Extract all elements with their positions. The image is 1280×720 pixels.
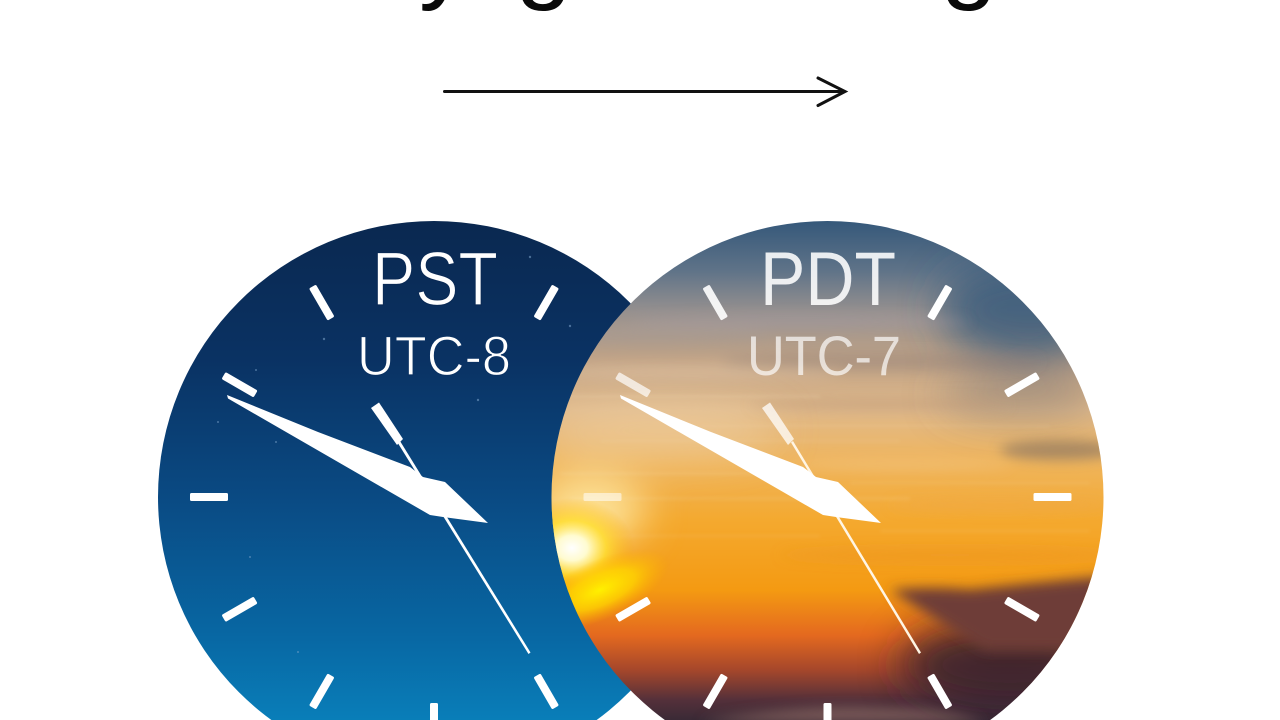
label: PST: PST	[372, 237, 498, 322]
label: PDT: PDT	[760, 237, 896, 322]
second hand	[762, 402, 921, 654]
hour and minute hands	[227, 395, 488, 523]
stars	[217, 256, 571, 653]
clock: PDT summer time	[510, 221, 1120, 720]
arrow: time moves forward	[444, 78, 845, 106]
dark clouds	[700, 576, 1110, 720]
clock: PST winter time	[158, 221, 710, 720]
night sky dial	[158, 221, 710, 720]
fine horizontal streaks	[650, 497, 908, 500]
second hand	[371, 402, 530, 654]
label: UTC-8: UTC-8	[357, 324, 511, 387]
sunset sky dial	[510, 221, 1120, 720]
hour ticks	[190, 285, 559, 720]
hour and minute hands	[620, 395, 881, 523]
hour ticks	[584, 285, 1072, 720]
soft sky masses	[535, 260, 1120, 710]
label: UTC-7: UTC-7	[747, 324, 901, 387]
sun glow	[552, 500, 630, 592]
sky colour streaks	[578, 324, 1101, 556]
